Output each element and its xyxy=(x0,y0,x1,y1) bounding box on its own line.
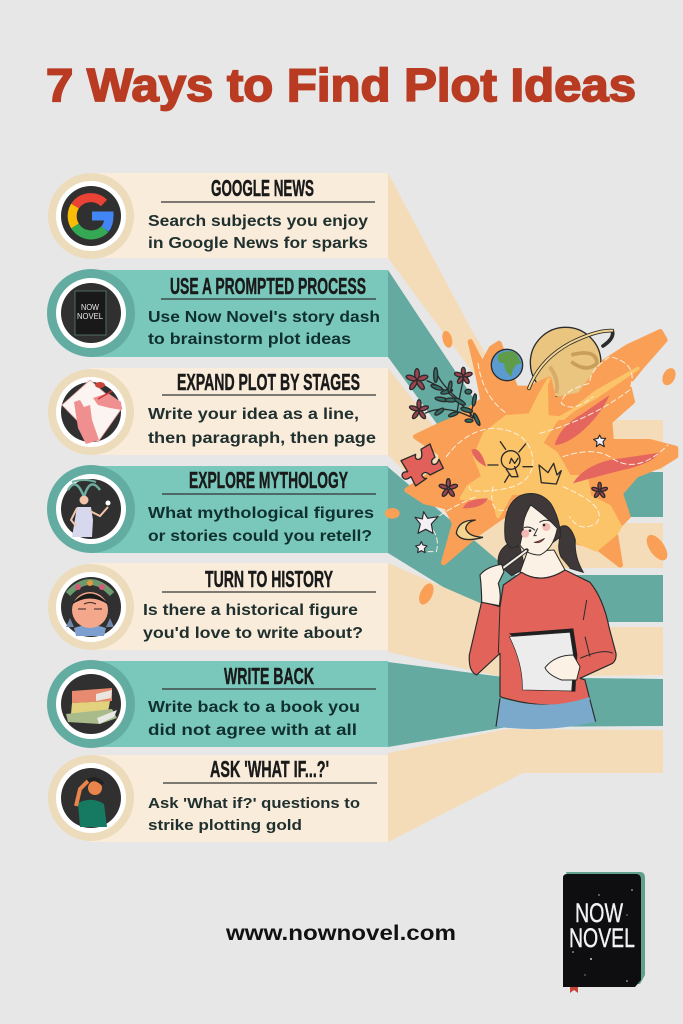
planet ring xyxy=(529,331,613,388)
panel: explore mythology xyxy=(47,465,388,553)
text block: Write back to a book you xyxy=(148,699,360,716)
ribbon folds leading to the illustration xyxy=(388,173,663,842)
panel: google news xyxy=(48,173,388,259)
text block: strike plotting gold xyxy=(148,818,302,834)
text block: What mythological figures xyxy=(148,505,374,522)
heading: ASK 'WHAT IF...?' xyxy=(210,756,329,782)
neck xyxy=(520,550,565,578)
icon: frida portrait xyxy=(66,580,114,636)
panel: expand plot by stages xyxy=(48,368,388,455)
icon: crown xyxy=(539,463,561,484)
icon: red flower xyxy=(439,479,458,497)
illustration: woman with notepad xyxy=(469,494,616,729)
pencil xyxy=(502,550,527,569)
face details xyxy=(521,520,550,543)
heading: EXPAND PLOT BY STAGES xyxy=(177,369,360,395)
face xyxy=(520,505,557,555)
planet body xyxy=(530,327,601,398)
logo: now novel book xyxy=(563,872,645,993)
title: 7 Ways to Find Plot Ideas xyxy=(46,59,636,111)
icon: now novel book xyxy=(75,291,106,335)
logo: now novel book: NOVEL xyxy=(569,923,635,953)
sweater fold lines xyxy=(498,600,613,658)
heading: GOOGLE NEWS xyxy=(211,175,314,201)
text block: then paragraph, then page xyxy=(148,430,376,447)
icon: hands writing on paper xyxy=(62,380,122,444)
icon: thinking person xyxy=(76,779,107,827)
icon: puzzle piece xyxy=(401,444,443,486)
icon: stack of books xyxy=(66,688,117,724)
panel: turn to history xyxy=(48,563,388,650)
panel: ask what if xyxy=(48,755,388,842)
text block: to brainstorm plot ideas xyxy=(148,331,351,348)
icon: moon xyxy=(456,520,483,540)
logo: now novel book: NOW xyxy=(575,898,623,928)
hand holding notepad xyxy=(545,655,580,680)
skirt xyxy=(496,697,596,729)
icon: stars xyxy=(415,435,606,553)
icon: medusa figure xyxy=(68,480,110,537)
sweater xyxy=(469,570,616,705)
text block: you'd love to write about? xyxy=(143,625,363,642)
text block: did not agree with at all xyxy=(148,722,357,739)
text block: Search subjects you enjoy xyxy=(148,213,368,230)
text block: Ask 'What if?' questions to xyxy=(148,796,360,812)
icon: now novel book: NOVEL xyxy=(77,311,103,321)
text block: in Google News for sparks xyxy=(148,235,368,252)
hair main xyxy=(505,494,561,548)
text block: Use Now Novel's story dash xyxy=(148,309,380,326)
hair underside xyxy=(555,540,570,568)
heading: USE A PROMPTED PROCESS xyxy=(170,273,366,299)
illustration: idea burst xyxy=(385,327,678,607)
icon: earth xyxy=(491,349,523,381)
orange petals xyxy=(385,330,678,607)
heading: WRITE BACK xyxy=(224,663,314,689)
hair pigtails xyxy=(498,526,583,576)
flowers xyxy=(406,367,473,420)
text block: or stories could you retell? xyxy=(148,528,372,545)
icon: lightbulb xyxy=(488,442,532,482)
text block: Is there a historical figure xyxy=(143,602,358,619)
icon: google G xyxy=(72,198,109,235)
panel: write back xyxy=(47,660,388,748)
icon: now novel book: NOW xyxy=(81,302,99,312)
panel: use a prompted process xyxy=(47,269,388,357)
orange burst xyxy=(407,332,676,565)
dashed trails xyxy=(426,357,668,552)
icon: plant sprigs xyxy=(406,367,481,426)
heading: EXPLORE MYTHOLOGY xyxy=(189,467,348,493)
notepad xyxy=(509,628,577,692)
yellow burst xyxy=(461,368,638,550)
red streaks xyxy=(463,395,660,508)
heading: TURN TO HISTORY xyxy=(205,566,333,592)
website url: www.nownovel.com xyxy=(225,922,456,945)
icon: small flower xyxy=(591,482,608,498)
hand holding pencil xyxy=(480,564,504,606)
text block: Write your idea as a line, xyxy=(148,406,359,423)
